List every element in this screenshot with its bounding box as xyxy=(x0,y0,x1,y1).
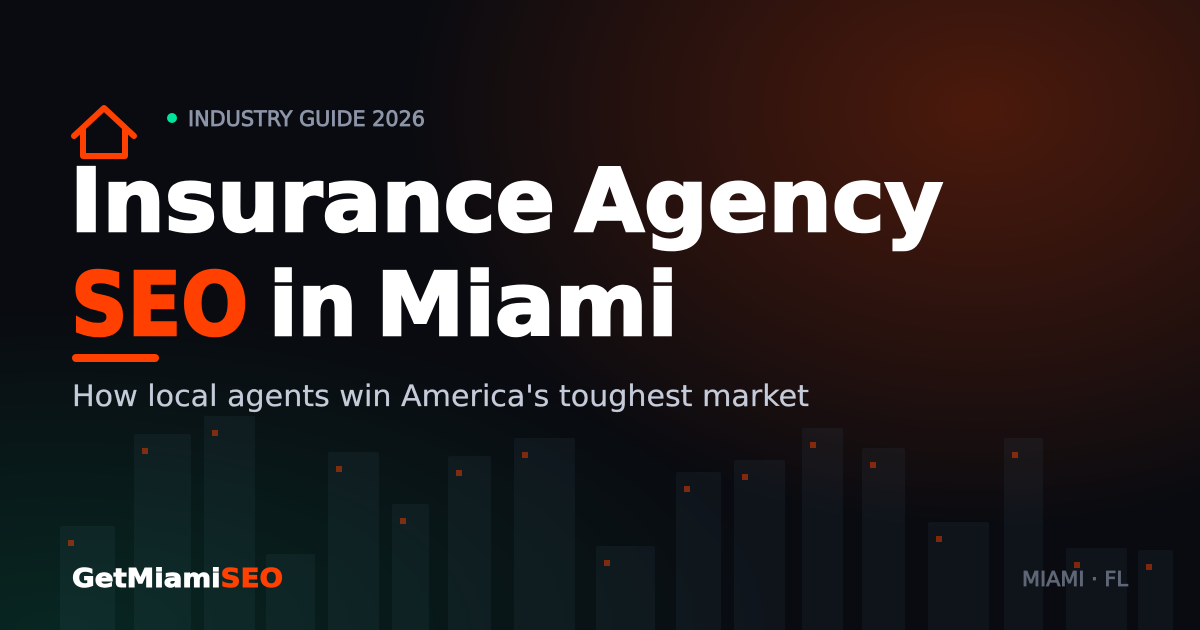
title: Miami xyxy=(376,254,678,356)
eyebrow label: INDUSTRY GUIDE 2026 xyxy=(188,107,425,131)
title underline xyxy=(72,354,159,362)
title: SEO xyxy=(71,254,248,356)
subtitle: How local agents win America's toughest market xyxy=(72,379,809,413)
icon: house xyxy=(74,108,134,156)
skyline of buildings xyxy=(60,416,1173,630)
location label: MIAMI · FL xyxy=(1022,567,1129,591)
title: Agency xyxy=(575,150,943,252)
title: Insurance xyxy=(70,150,555,252)
title: in xyxy=(269,254,357,356)
title xyxy=(70,150,943,356)
status dot xyxy=(167,113,177,123)
brand logo: GetMiami SEO xyxy=(72,564,283,594)
